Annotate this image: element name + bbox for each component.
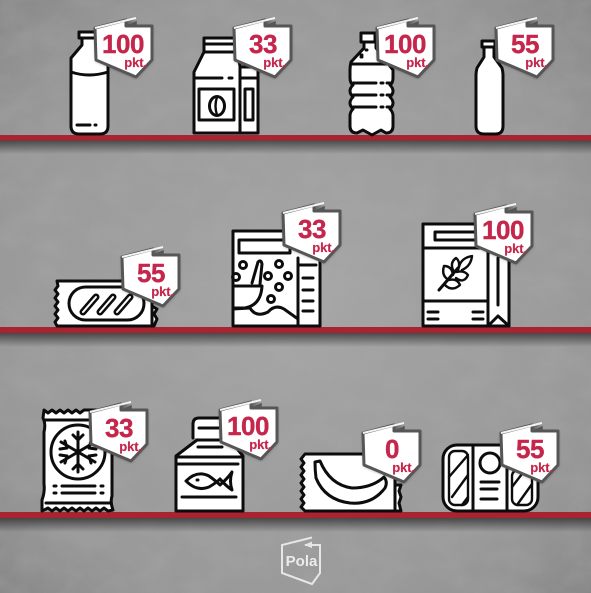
badge: frozen 33 pkt: pkt. [119,439,142,454]
badge: banana 0 pkt: 0 [385,434,399,464]
badge: bottle 100 pkt: 100 [102,29,144,59]
badge: bottle 55 pkt: pkt. [525,55,548,70]
badge: coffee 33 pkt [234,18,291,78]
icon: fish can [176,418,243,511]
badge: bottle 55 pkt [496,18,553,78]
badge: fish 100 pkt: 100 [227,411,269,441]
icon: frozen food bag [42,410,113,511]
badge: fish 100 pkt: pkt. [249,437,272,452]
shelf 1 [0,135,591,154]
badge: cereal 33 pkt [283,203,340,263]
badge: cereal 33 pkt: pkt. [312,240,335,255]
badge: bottle 100 pkt: pkt. [124,55,147,70]
badge: bread 55 pkt: pkt. [151,284,174,299]
badge: bottle 55 pkt: 55 [511,29,539,59]
icon: glass bottle [476,41,503,134]
badge: frozen 33 pkt: 33 [105,413,133,443]
icon: banana pack [301,454,401,511]
icon: coffee pack [194,38,258,133]
badge: bottle 100 pkt [95,18,152,78]
badge: water 100 pkt: 100 [384,29,426,59]
badge: fish 100 pkt [220,400,277,460]
shelf 3 [0,512,591,532]
icon: cereal box [232,231,320,326]
badge: tray 55 pkt: 55 [516,434,544,464]
badge: tray 55 pkt: pkt. [530,460,553,475]
icon: flour bag [423,224,509,326]
badge: cereal 33 pkt: 33 [298,214,326,244]
badge: bread 55 pkt: 55 [137,258,165,288]
badge: banana 0 pkt: pkt. [392,460,415,475]
badge: tray 55 pkt [501,423,558,483]
icon: bread pack [55,281,157,326]
icon: milk bottle [71,32,108,134]
badge: flour 100 pkt [475,204,532,264]
badge: water 100 pkt: pkt. [406,55,429,70]
badge: bread 55 pkt [122,247,179,307]
badge: coffee 33 pkt: 33 [249,29,277,59]
badge: frozen 33 pkt [90,402,147,462]
shelf 2 [0,327,591,347]
badge: water 100 pkt [377,18,434,78]
logo: Pola: Pola [286,553,318,570]
badge: coffee 33 pkt: pkt. [263,55,286,70]
badge: banana 0 pkt [363,423,420,483]
badge: flour 100 pkt: 100 [482,215,524,245]
icon: ready meal tray [443,445,538,511]
badge: flour 100 pkt: pkt. [504,241,527,256]
icon: plastic water bottle [350,33,393,135]
logo: Pola [282,538,320,584]
